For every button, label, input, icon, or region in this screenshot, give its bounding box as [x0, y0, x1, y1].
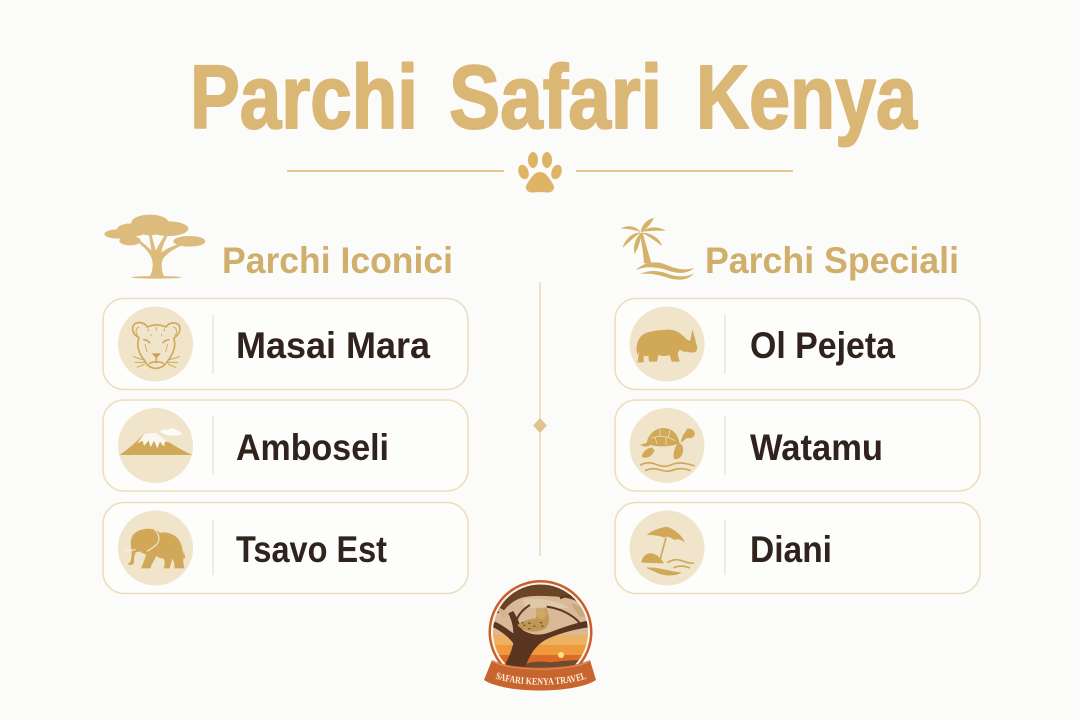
label: Amboseli [236, 427, 389, 468]
card: Diani [615, 502, 980, 594]
icon: turtle [640, 428, 695, 471]
logo: Safari Kenya Travel [484, 580, 596, 690]
title divider with paw [287, 152, 793, 193]
ribbon [484, 660, 596, 690]
card: Tsavo Est [103, 502, 468, 594]
label: Ol Pejeta [750, 325, 895, 366]
heading: Parchi Iconici: Parchi Iconici [222, 240, 453, 281]
title: Parchi [190, 48, 418, 148]
label: Watamu [750, 427, 883, 468]
icon: acacia tree [104, 215, 205, 279]
title [190, 48, 918, 148]
title: Safari [449, 48, 662, 148]
center divider [533, 282, 547, 556]
logo: Safari Kenya Travel: SAFARI KENYA TRAVEL [496, 672, 586, 685]
heading: Parchi Speciali: Parchi Speciali [705, 240, 959, 281]
card: Watamu [615, 400, 980, 491]
label: Diani [750, 529, 832, 570]
icon: Kilimanjaro [119, 428, 193, 455]
icon: beach umbrella [641, 527, 694, 575]
icon: rhino [636, 330, 697, 362]
icon: paw [516, 152, 564, 193]
card: Masai Mara [103, 298, 468, 390]
label: Tsavo Est [236, 529, 387, 570]
label: Masai Mara [236, 325, 430, 366]
card: Amboseli [103, 400, 468, 491]
icon: elephant [125, 529, 186, 568]
card: Ol Pejeta [615, 298, 980, 390]
icon: palm and waves [621, 218, 694, 280]
icon: cheetah face [133, 323, 180, 368]
title: Kenya [696, 48, 918, 148]
